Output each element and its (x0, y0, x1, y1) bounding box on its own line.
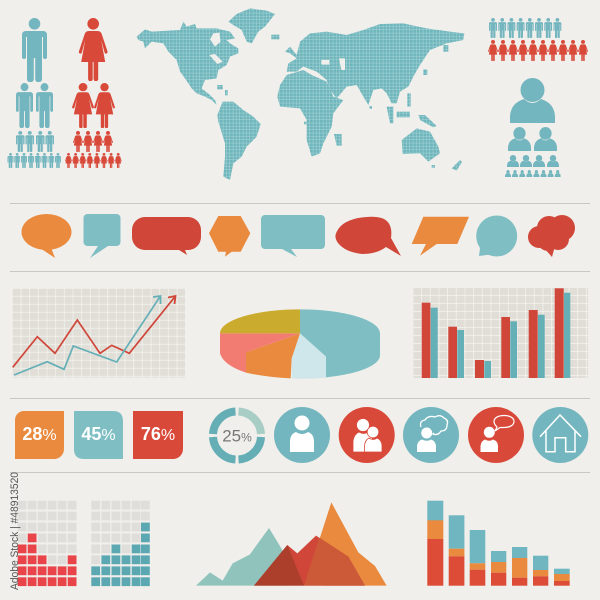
bubble: red blob (335, 217, 401, 256)
teal line with arrow (14, 296, 160, 375)
panel: female population pyramid (65, 18, 122, 168)
slice: pink (220, 333, 300, 373)
waffle chart: teal (91, 501, 150, 586)
bubble: teal square (84, 214, 120, 258)
dotted world map (137, 8, 464, 180)
bar chart (413, 288, 588, 378)
mountain: red (254, 536, 365, 586)
tile: 45% (74, 411, 123, 459)
icon: person with speech bubble (468, 407, 524, 463)
mountain chart (196, 502, 387, 586)
donut gauge 25% (213, 412, 261, 460)
bubble: teal round (476, 216, 517, 256)
tile: 28% (15, 411, 64, 459)
line chart (13, 289, 185, 378)
overlap: orange and red (304, 538, 365, 586)
stacked bar 5 (512, 547, 527, 586)
red bars (422, 288, 564, 378)
3D pie chart (220, 309, 380, 379)
tile: 28%: 28% (22, 424, 57, 444)
teal bars (431, 293, 570, 378)
bubble: orange hexagon (209, 216, 250, 257)
bubble: red pill (132, 217, 201, 255)
bubble: red cloud (528, 215, 575, 257)
tile: 45%: 45% (81, 424, 116, 444)
red line with arrow (13, 296, 176, 367)
bubble: orange oval (22, 214, 72, 258)
panel: leader and audience hierarchy (505, 78, 561, 177)
slice: pale blue (292, 333, 326, 379)
row of women (488, 40, 588, 61)
stacked bar 4 (491, 551, 506, 586)
slice: teal (300, 309, 380, 377)
stacked bar chart (427, 501, 570, 586)
icon: house (532, 407, 588, 463)
stacked bar 6 (533, 556, 548, 586)
icon: person (274, 407, 330, 463)
waffle chart: red (18, 501, 76, 586)
donut gauge 25%: 25% (222, 426, 252, 446)
panel: male and female counts (488, 18, 588, 61)
watermark id text: Adobe Stock | #48913520 (9, 472, 21, 590)
stacked bar 3 (470, 530, 485, 586)
icon: person with thought cloud (403, 407, 459, 463)
tile: 76%: 76% (141, 424, 175, 444)
bubble: orange parallelogram (412, 217, 469, 256)
mountain: orange (316, 502, 387, 586)
bubble: teal wide (261, 215, 325, 257)
panel: male population pyramid (8, 18, 61, 168)
slice: orange (246, 333, 300, 378)
row of men (489, 18, 561, 38)
slice: mustard (220, 309, 300, 333)
tile: 76% (133, 411, 183, 459)
stacked bar 2 (449, 515, 464, 586)
icon: two people (339, 407, 395, 463)
mountain: teal (196, 528, 287, 586)
stacked bar 7 (554, 569, 570, 586)
stacked bar 1 (427, 501, 443, 586)
overlap: teal and red (254, 545, 304, 586)
panel: speech bubbles (22, 214, 575, 258)
